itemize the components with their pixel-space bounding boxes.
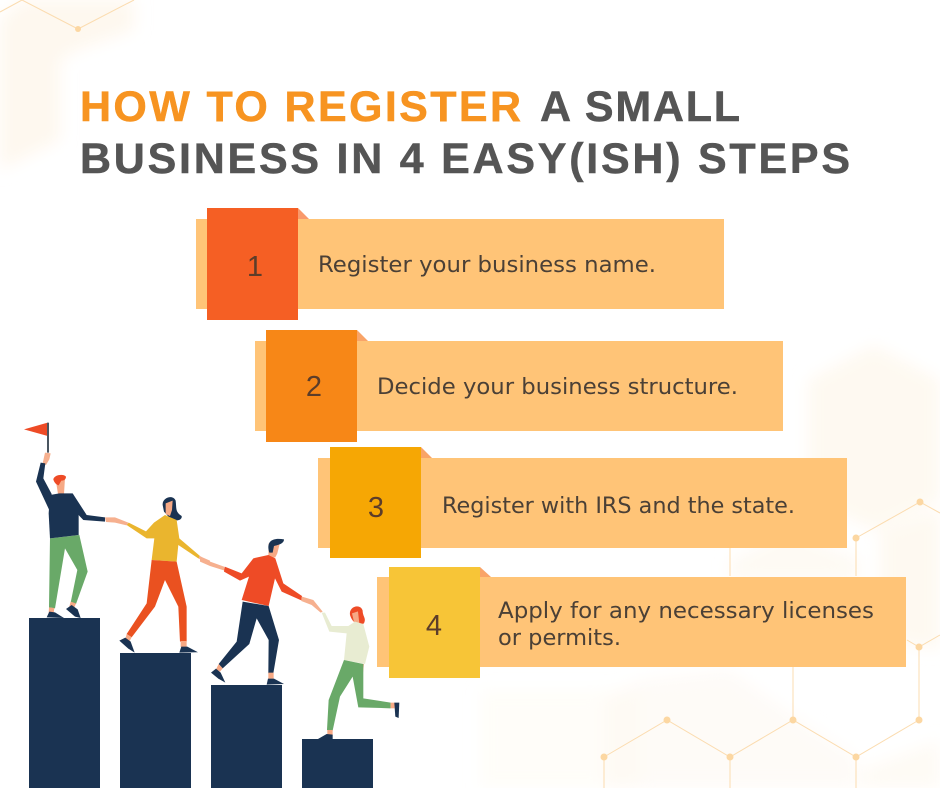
title: A SMALL	[540, 83, 740, 131]
title	[80, 83, 850, 183]
step 3: Register with IRS and the state.	[442, 494, 795, 519]
illustration: man in red	[200, 539, 323, 685]
step 1: 1	[247, 251, 263, 283]
step 4	[377, 567, 906, 678]
step 3: 3	[368, 492, 384, 524]
step 1: Register your business name.	[318, 253, 656, 278]
step 2	[255, 330, 783, 442]
illustration: woman in green	[318, 606, 399, 739]
illustration: figure with flag	[24, 423, 128, 618]
step 4: Apply for any necessary licenses	[498, 599, 874, 624]
step 2: 2	[306, 371, 322, 403]
step 4: 4	[426, 610, 442, 642]
title: HOW TO REGISTER	[80, 83, 521, 131]
illustration: woman in yellow	[119, 497, 210, 653]
illustration: podium bars	[29, 618, 373, 788]
step 3	[318, 447, 847, 558]
step 2: Decide your business structure.	[377, 375, 738, 400]
step 1	[196, 208, 724, 320]
step 4: or permits.	[498, 626, 621, 651]
title: BUSINESS IN 4 EASY(ISH) STEPS	[80, 135, 850, 183]
